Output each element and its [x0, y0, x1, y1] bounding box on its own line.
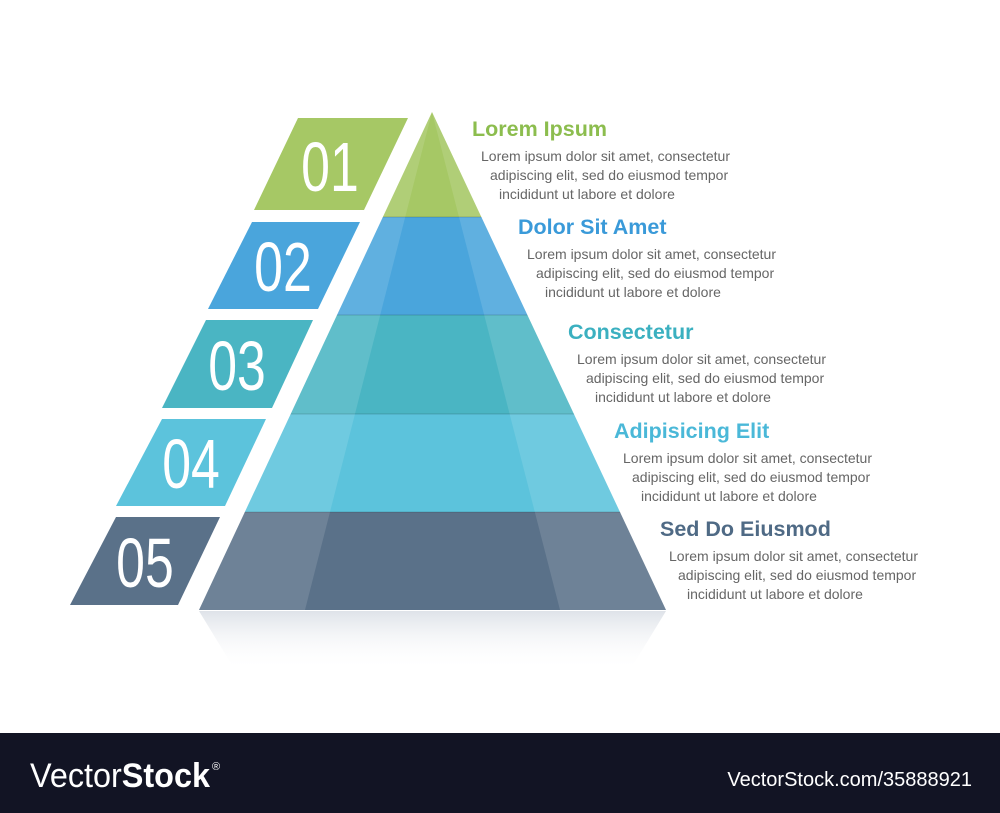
- text block 1: Lorem ipsum dolor sit amet, consectetur: [481, 148, 730, 164]
- text block 2: incididunt ut labore et dolore: [545, 284, 721, 300]
- text block 4: Adipisicing Elit: [614, 419, 769, 443]
- text block 4: [614, 419, 872, 504]
- text block 1: Lorem Ipsum: [472, 117, 607, 141]
- text block 2: adipiscing elit, sed do eiusmod tempor: [536, 265, 774, 281]
- layer 5: [190, 512, 680, 610]
- text block 3: Consectetur: [568, 320, 694, 344]
- text block 5: Lorem ipsum dolor sit amet, consectetur: [669, 548, 918, 564]
- footer bar: VectorStock.com/35888921: [727, 769, 972, 791]
- number 03: [162, 320, 313, 408]
- layer 2: [337, 217, 528, 315]
- text block 1: [472, 117, 730, 202]
- pyramid: [190, 100, 680, 610]
- reflection: [199, 611, 666, 670]
- layer 3: [290, 315, 574, 414]
- number 02: 02: [254, 228, 312, 307]
- number 04: 04: [162, 425, 220, 504]
- footer bar: ®: [212, 761, 220, 773]
- text block 2: Lorem ipsum dolor sit amet, consectetur: [527, 246, 776, 262]
- number 05: 05: [116, 524, 174, 603]
- text block 3: [568, 320, 826, 405]
- footer bar: [0, 733, 1000, 813]
- number 01: [254, 118, 408, 210]
- text block 3: adipiscing elit, sed do eiusmod tempor: [586, 370, 824, 386]
- text block 2: [518, 215, 776, 300]
- text block 4: adipiscing elit, sed do eiusmod tempor: [632, 469, 870, 485]
- text block 5: incididunt ut labore et dolore: [687, 586, 863, 602]
- text block 5: [660, 517, 918, 602]
- layer 1: [382, 112, 482, 217]
- text block 1: incididunt ut labore et dolore: [499, 186, 675, 202]
- text block 4: incididunt ut labore et dolore: [641, 488, 817, 504]
- text block 4: Lorem ipsum dolor sit amet, consectetur: [623, 450, 872, 466]
- text block 5: adipiscing elit, sed do eiusmod tempor: [678, 567, 916, 583]
- footer bar: VectorStock: [30, 757, 210, 795]
- text block 5: Sed Do Eiusmod: [660, 517, 831, 541]
- number 02: [208, 222, 360, 309]
- text block 1: adipiscing elit, sed do eiusmod tempor: [490, 167, 728, 183]
- number 03: 03: [208, 327, 266, 406]
- text block 2: Dolor Sit Amet: [518, 215, 667, 239]
- text block 3: Lorem ipsum dolor sit amet, consectetur: [577, 351, 826, 367]
- number 01: 01: [301, 128, 359, 207]
- number 05: [70, 517, 220, 605]
- layer 4: [244, 414, 620, 512]
- text block 3: incididunt ut labore et dolore: [595, 389, 771, 405]
- number 04: [116, 419, 266, 506]
